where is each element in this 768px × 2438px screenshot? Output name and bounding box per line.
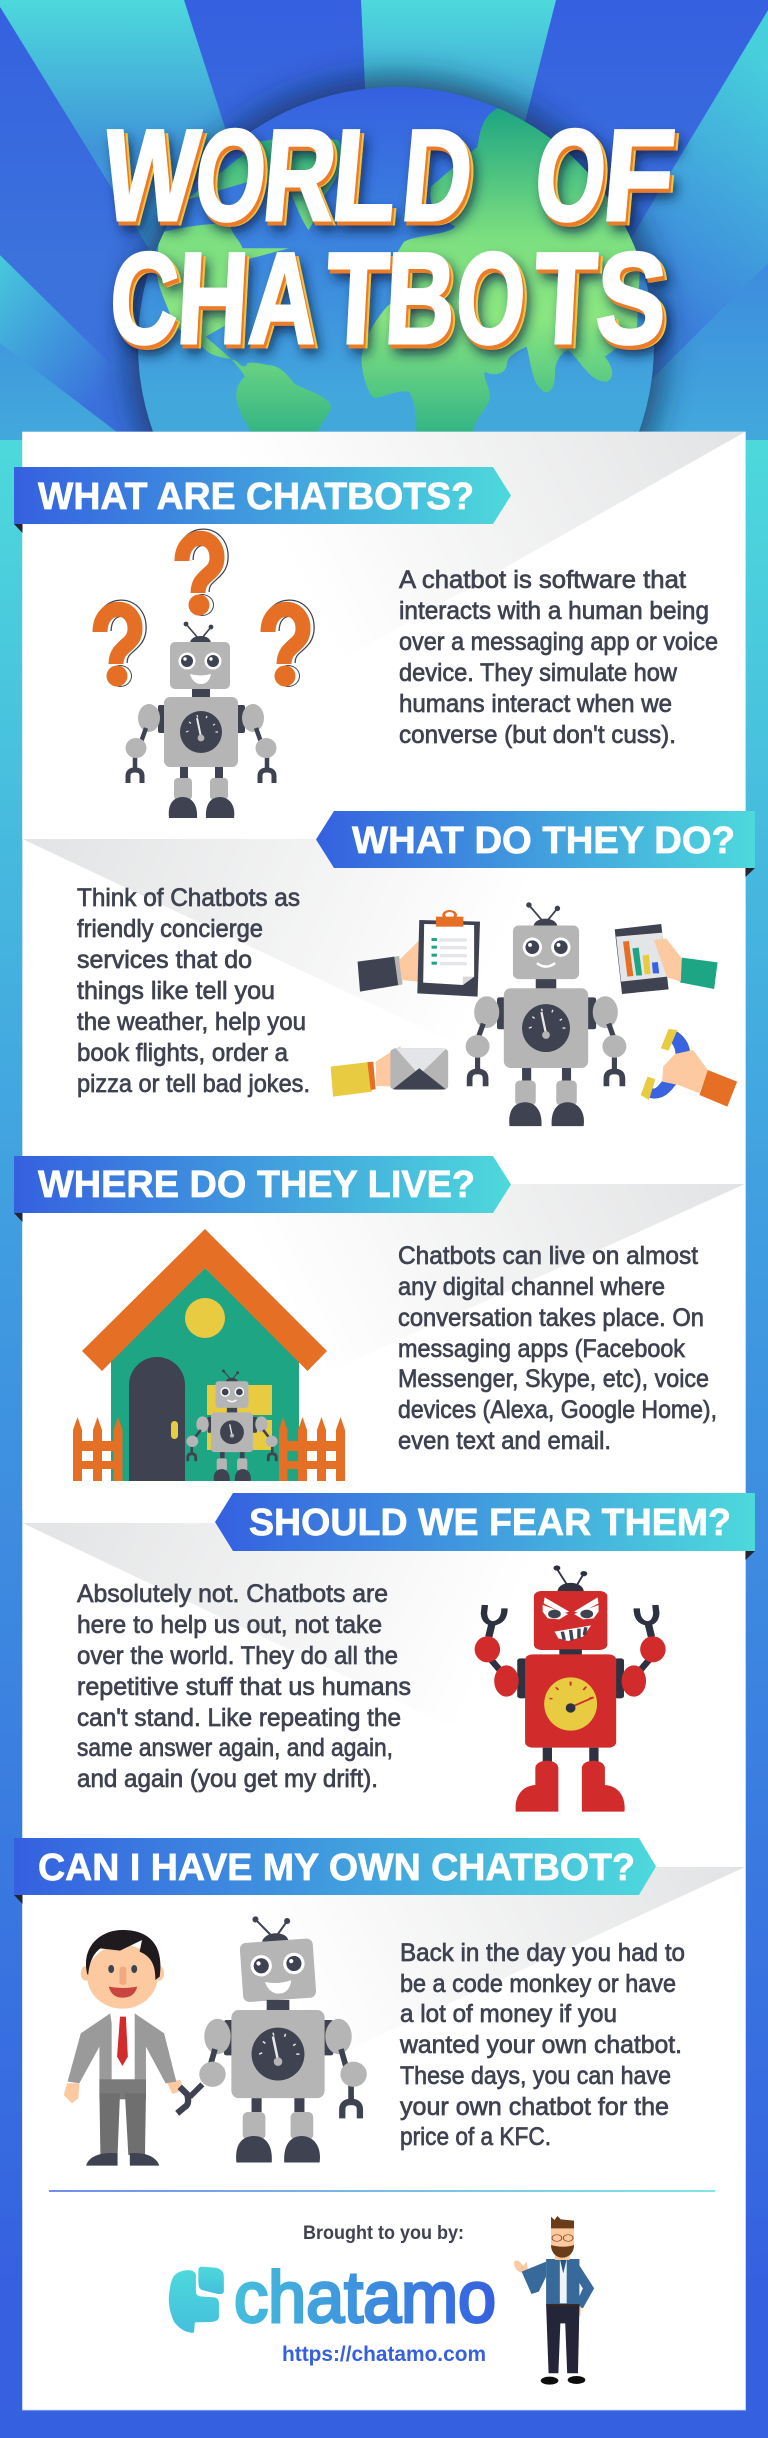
text: can I have my own chatbot: Back in the day you had to bbox=[400, 1939, 685, 1967]
banner: Should we fear them? bbox=[215, 1493, 755, 1560]
footer credit: brought to you by: Brought to you by: bbox=[303, 2223, 464, 2244]
text: what do they do: friendly concierge bbox=[77, 915, 263, 943]
banner: Can I have my own chatbot?: CAN I HAVE MY OWN CHATBOT? bbox=[38, 1847, 635, 1889]
robot: holding man's hand bbox=[177, 1913, 367, 2162]
icon: hand holding tablet chart bbox=[615, 924, 718, 994]
text: what are chatbots: interacts with a human being bbox=[399, 597, 709, 625]
text: can I have my own chatbot: a lot of money if you bbox=[400, 2000, 617, 2028]
text: should we fear them: same answer again, and again, bbox=[77, 1734, 393, 1762]
icon: question mark right bbox=[268, 608, 306, 687]
banner: What are chatbots? bbox=[14, 467, 511, 533]
icon: hand holding envelope bbox=[331, 1046, 448, 1097]
text: where do they live bbox=[398, 1242, 717, 1455]
title: World of Chatbots: T bbox=[323, 225, 392, 371]
title: World of Chatbots: O bbox=[453, 225, 529, 371]
text: what do they do: services that do bbox=[77, 946, 252, 974]
text: what do they do: things like tell you bbox=[77, 977, 275, 1005]
robot: section 2 bbox=[466, 902, 626, 1126]
banner: Where do they live?: WHERE DO THEY LIVE? bbox=[38, 1164, 475, 1206]
title: World of Chatbots: W bbox=[98, 102, 204, 248]
text: where do they live: Messenger, Skype, etc), voice bbox=[398, 1365, 709, 1393]
white content panel bbox=[22, 432, 746, 2410]
decorative triangle 1 bbox=[22, 432, 745, 840]
banner: Where do they live? bbox=[14, 1156, 511, 1222]
text: should we fear them: and again (you get my drift). bbox=[77, 1765, 378, 1793]
logo: chatamo: chatamo bbox=[234, 2258, 496, 2338]
decorative triangle 4 bbox=[22, 1523, 745, 1866]
text: what are chatbots: converse (but don't cuss). bbox=[399, 721, 676, 749]
robot: section 1 bbox=[126, 622, 276, 818]
title: World of Chatbots: R bbox=[258, 102, 342, 248]
text: should we fear them: can't stand. Like repeating the bbox=[77, 1704, 401, 1732]
robot: in the house bbox=[186, 1370, 278, 1481]
globe shadow bbox=[128, 77, 664, 613]
title: World of Chatbots: F bbox=[598, 102, 680, 248]
footer link: chatamo url: https://chatamo.com bbox=[282, 2343, 486, 2366]
text: can I have my own chatbot bbox=[399, 1939, 685, 2151]
text: what do they do: pizza or tell bad jokes. bbox=[77, 1070, 310, 1098]
title: World of Chatbots: D bbox=[397, 102, 478, 248]
text: should we fear them: here to help us out, not take bbox=[77, 1611, 382, 1639]
icon: question mark top bbox=[182, 537, 220, 616]
text: where do they live: Chatbots can live on almost bbox=[398, 1242, 698, 1270]
text: where do they live: messaging apps (Facebook bbox=[398, 1335, 685, 1363]
title: World of Chatbots: H bbox=[174, 225, 252, 371]
icon: hand holding clipboard bbox=[358, 911, 480, 997]
text: what are chatbots: over a messaging app or voice bbox=[399, 628, 718, 656]
title: World of Chatbots bbox=[98, 102, 680, 371]
text: can I have my own chatbot: be a code monkey or have bbox=[400, 1970, 676, 1998]
header sunburst background bbox=[0, 0, 768, 640]
title: World of Chatbots: B bbox=[382, 225, 459, 371]
text: what are chatbots: A chatbot is software that bbox=[399, 566, 686, 594]
title: World of Chatbots: O bbox=[190, 102, 272, 248]
illustration: house with fence bbox=[73, 1229, 345, 1481]
text: can I have my own chatbot: price of a KFC. bbox=[400, 2123, 551, 2151]
title: World of Chatbots: A bbox=[246, 225, 321, 371]
text: what are chatbots bbox=[399, 566, 718, 749]
text: where do they live: devices (Alexa, Google Home), bbox=[398, 1396, 717, 1424]
text: what do they do: book flights, order a bbox=[77, 1039, 288, 1067]
text: should we fear them: Absolutely not. Chatbots are bbox=[77, 1580, 388, 1608]
banner: Should we fear them?: SHOULD WE FEAR THEM? bbox=[249, 1502, 731, 1544]
decorative triangle 2 bbox=[22, 839, 745, 1180]
decorative triangle 5 bbox=[22, 1867, 745, 2200]
text: can I have my own chatbot: wanted your own chatbot. bbox=[399, 2031, 682, 2059]
title: World of Chatbots: O bbox=[530, 102, 612, 248]
icon: hand holding phone bbox=[641, 1029, 737, 1107]
robot: angry red bbox=[475, 1565, 666, 1812]
text: what do they do: the weather, help you bbox=[77, 1008, 306, 1036]
title: World of Chatbots: T bbox=[531, 225, 600, 371]
icon: question mark left bbox=[100, 608, 138, 687]
text: can I have my own chatbot: These days, you can have bbox=[400, 2062, 671, 2090]
text: should we fear them: over the world. They do all the bbox=[77, 1642, 398, 1670]
banner: What do they do? bbox=[316, 811, 755, 877]
text: can I have my own chatbot: your own chatbot for the bbox=[400, 2093, 669, 2121]
globe with continents bbox=[130, 80, 660, 440]
text: where do they live: any digital channel where bbox=[398, 1273, 665, 1301]
title: World of Chatbots: L bbox=[327, 102, 403, 248]
text: what do they do bbox=[77, 884, 310, 1098]
text: what do they do: Think of Chatbots as bbox=[77, 884, 300, 912]
text: where do they live: even text and email. bbox=[398, 1427, 611, 1455]
text: where do they live: conversation takes place. On bbox=[398, 1304, 704, 1332]
decorative triangle 3 bbox=[22, 1184, 745, 1510]
banner: What do they do?: WHAT DO THEY DO? bbox=[352, 820, 735, 862]
title: World of Chatbots: C bbox=[107, 225, 182, 371]
text: should we fear them: repetitive stuff that us humans bbox=[77, 1673, 411, 1701]
banner: Can I have my own chatbot? bbox=[14, 1838, 656, 1904]
title: World of Chatbots: S bbox=[593, 225, 670, 371]
text: should we fear them bbox=[77, 1580, 411, 1793]
text: what are chatbots: humans interact when we bbox=[399, 690, 672, 718]
banner: What are chatbots?: WHAT ARE CHATBOTS? bbox=[38, 476, 474, 518]
illustration: man in suit bbox=[64, 1930, 184, 2166]
text: what are chatbots: device. They simulate how bbox=[399, 659, 678, 687]
illustration: bearded man bbox=[514, 2216, 594, 2385]
